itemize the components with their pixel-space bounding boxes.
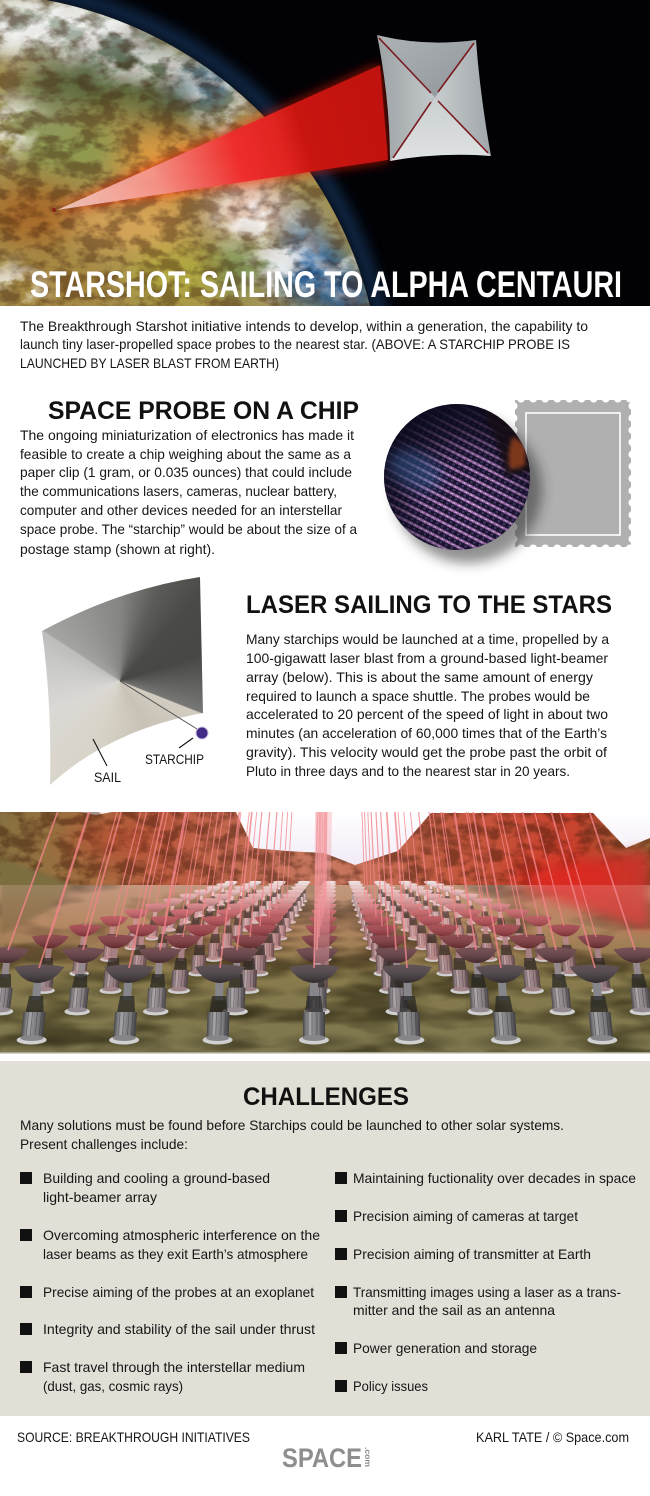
text block: laser sailing: required to launch a space shuttle. The probes would be	[246, 688, 590, 704]
text block: laser sailing: minutes (an acceleration of 60,000 times that of the Earth’s	[246, 725, 607, 741]
list: right column challenges: Policy issues	[353, 1378, 428, 1394]
mountains	[0, 812, 650, 885]
panel: light-beamer array image	[0, 812, 650, 1052]
footer: source credit: SOURCE: BREAKTHROUGH INITIATIVES	[17, 1429, 250, 1445]
footer: author credit: KARL TATE / © Space.com	[476, 1429, 629, 1445]
heading: laser sailing to the stars: LASER SAILING TO THE STARS	[246, 591, 612, 619]
laser origin on Earth	[52, 208, 56, 212]
list: right column challenges: mitter and the sail as an antenna	[353, 1302, 555, 1318]
list: left column challenges: Precise aiming of the probes at an exoplanet	[43, 1284, 314, 1300]
text block: space probe on a chip: computer and other devices needed for an interstellar	[20, 502, 342, 518]
hillsides	[0, 860, 72, 935]
text block: space probe on a chip: feasible to create a chip weighing about the same as a	[20, 446, 351, 462]
label: starchip: STARCHIP	[145, 751, 204, 767]
text block: laser sailing: accelerated to 20 percent of the speed of light in about two	[246, 706, 608, 722]
text block: space probe on a chip	[20, 427, 357, 557]
distance haze	[0, 885, 650, 964]
text block: laser sailing: Many starchips would be launched at a time, propelled by a	[246, 631, 609, 647]
list: left column challenges: Integrity and stability of the sail under thrust	[43, 1321, 315, 1337]
text block: laser sailing: array (below). This is about the same amount of energy	[246, 669, 593, 685]
text block: space probe on a chip: the communications lasers, cameras, nuclear battery,	[20, 483, 337, 499]
ground	[0, 885, 650, 1053]
heading: challenges: CHALLENGES	[243, 1083, 409, 1111]
central beam bundle	[314, 812, 332, 965]
intro text: LAUNCHED BY LASER BLAST FROM EARTH)	[20, 355, 279, 371]
logo: Space.com: .com	[363, 1447, 372, 1467]
list: right column challenges: Precision aiming of cameras at target	[353, 1208, 578, 1224]
icon: starchip dot	[196, 727, 208, 739]
laser beams	[7, 812, 636, 968]
sky	[248, 833, 650, 865]
antenna rows, far to near	[0, 881, 650, 1052]
intro text: The Breakthrough Starshot initiative intends to develop, within a generation, the capability to	[20, 318, 588, 334]
list: left column challenges	[20, 1170, 320, 1394]
challenges introduction: Present challenges include:	[20, 1136, 188, 1152]
Earth globe	[0, 0, 370, 306]
text block: laser sailing: gravity). This velocity would get the probe past the orbit of	[246, 744, 607, 760]
list: left column challenges: Fast travel through the interstellar medium	[43, 1359, 305, 1375]
text block: space probe on a chip: The ongoing miniaturization of electronics has made it	[20, 427, 354, 443]
panel: hero image of laser-propelled sail leaving Earth	[0, 0, 650, 306]
list: left column challenges: laser beams as they exit Earth’s atmosphere	[43, 1246, 308, 1262]
text block: space probe on a chip: paper clip (1 gram, or 0.035 ounces) that could include	[20, 464, 352, 480]
label: sail: SAIL	[94, 769, 121, 785]
list: left column challenges: (dust, gas, cosmic rays)	[43, 1378, 183, 1394]
challenges introduction: Many solutions must be found before Starchips could be launched to other solar systems.	[20, 1117, 564, 1133]
light sail	[377, 35, 491, 161]
text block: laser sailing: 100-gigawatt laser blast from a ground-based light-beamer	[246, 650, 608, 666]
laser beam glow	[57, 65, 388, 210]
list: left column challenges: light-beamer array	[43, 1189, 157, 1205]
heading: space probe on a chip: SPACE PROBE ON A CHIP	[48, 397, 359, 425]
laser beam	[57, 65, 388, 210]
photo bottom edge	[0, 1052, 650, 1054]
logo: Space.com: SPACE	[282, 1443, 362, 1473]
list: left column challenges: Overcoming atmospheric interference on the	[43, 1227, 320, 1243]
list: left column challenges: Building and cooling a ground-based	[43, 1170, 270, 1186]
list: right column challenges: Power generation and storage	[353, 1340, 537, 1356]
text block: space probe on a chip: postage stamp (shown at right).	[20, 541, 215, 557]
text block: laser sailing: Pluto in three days and to the nearest star in 20 years.	[246, 763, 570, 779]
diagram: sail with starchip	[42, 577, 208, 785]
list: right column challenges	[335, 1170, 636, 1394]
intro text	[20, 318, 588, 371]
list: right column challenges: Maintaining fuctionality over decades in space	[353, 1170, 636, 1186]
list: right column challenges: Transmitting images using a laser as a trans-	[353, 1284, 621, 1300]
list: right column challenges: Precision aiming of transmitter at Earth	[353, 1246, 591, 1262]
panel: challenges	[0, 1061, 650, 1416]
intro text: launch tiny laser-propelled space probes to the nearest star. (ABOVE: A STARCHIP PROBE IS	[20, 336, 570, 352]
atmosphere glow around Earth	[47, 0, 393, 306]
text block: laser sailing	[246, 631, 609, 779]
icon: postage stamp	[514, 398, 632, 548]
starchip wafer image	[380, 400, 542, 563]
text block: space probe on a chip: space probe. The “starchip” would be about the size of a	[20, 521, 357, 537]
challenges introduction	[20, 1117, 564, 1152]
